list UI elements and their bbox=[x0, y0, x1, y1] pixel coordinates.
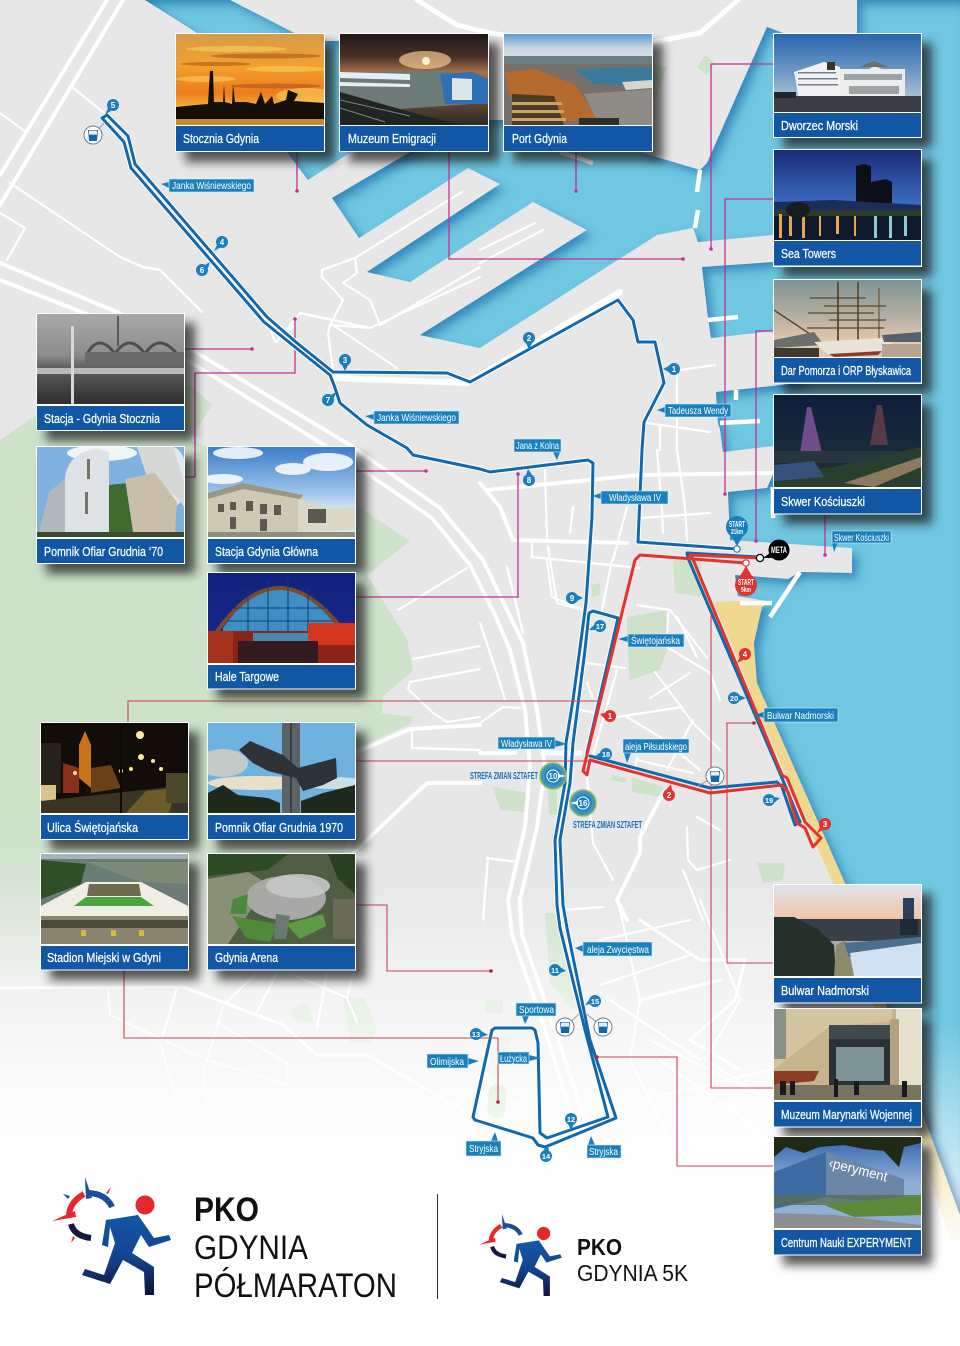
street label: Skwer Kościuszki: Skwer Kościuszki bbox=[834, 532, 889, 544]
logo text: PKO bbox=[194, 1191, 259, 1229]
beach sand bbox=[713, 600, 960, 1260]
blue half marathon route bbox=[102, 115, 800, 1147]
km marker: 2: 2 bbox=[527, 334, 532, 343]
caption: Port Gdynia bbox=[512, 131, 568, 146]
caption bbox=[208, 946, 356, 970]
logo text: PÓŁMARATON bbox=[194, 1267, 397, 1305]
photo: street at night bbox=[41, 723, 188, 813]
relay zone: 16 bbox=[570, 790, 596, 816]
km marker: 9 bbox=[566, 592, 583, 604]
logo: PKO Gdynia 5K bbox=[479, 1214, 689, 1296]
street label: Janka Wiśniewskiego south bbox=[365, 411, 459, 424]
caption bbox=[36, 406, 184, 430]
panel: Ulica Świętojańska bbox=[40, 722, 199, 850]
5K marker: 3: 3 bbox=[823, 820, 828, 829]
5K marker: 4: 4 bbox=[743, 650, 748, 659]
water station cup centre bbox=[698, 767, 724, 786]
photo: market hall at night bbox=[208, 573, 355, 663]
street label: Łużycka: Łużycka bbox=[500, 1053, 527, 1065]
5K marker: 2: 2 bbox=[667, 791, 672, 800]
km marker: 8 bbox=[523, 469, 535, 486]
photo: cruise ship and terminal bbox=[774, 34, 921, 112]
caption: Gdynia Arena bbox=[215, 950, 279, 965]
panel: Muzeum Emigracji bbox=[339, 33, 499, 162]
panel: Stocznia Gdynia bbox=[175, 33, 336, 162]
photo: main railway station bbox=[208, 447, 355, 537]
relay zone: 16: 16 bbox=[579, 799, 588, 808]
km marker: 15: 15 bbox=[591, 997, 599, 1006]
street label: Tadeusza Wendy bbox=[657, 404, 731, 417]
caption bbox=[208, 814, 356, 840]
caption bbox=[774, 978, 922, 1003]
km marker: 1 bbox=[663, 363, 680, 375]
caption bbox=[40, 946, 188, 970]
red 5K route bbox=[583, 555, 821, 847]
km marker: 11 bbox=[549, 964, 566, 976]
relay zone caption right: STREFA ZMIAN SZTAFET bbox=[573, 820, 642, 831]
km marker: 7: 7 bbox=[326, 396, 331, 405]
photo: emigration museum at night bbox=[340, 34, 488, 125]
km marker: 12 bbox=[565, 1113, 577, 1130]
street label: Stryjska west bbox=[466, 1132, 501, 1156]
street label: Sportowa bbox=[516, 1003, 556, 1024]
caption: Dar Pomorza i ORP Błyskawica bbox=[781, 363, 912, 378]
panel: Hale Targowe bbox=[207, 572, 366, 699]
logo divider bbox=[437, 1194, 438, 1299]
road network bbox=[0, 0, 773, 1200]
photo: city stadium bbox=[41, 854, 188, 944]
street label: Bulwar Nadmorski: Bulwar Nadmorski bbox=[767, 710, 834, 722]
meta finish marker: META bbox=[771, 545, 787, 555]
km marker: 17: 17 bbox=[596, 622, 604, 631]
caption bbox=[774, 112, 922, 138]
panel: Dar Pomorza i ORP Błyskawica bbox=[773, 279, 932, 394]
km marker: 14: 14 bbox=[542, 1152, 551, 1161]
caption bbox=[208, 664, 356, 689]
caption: Pomnik Ofiar Grudnia ‘70 bbox=[44, 544, 163, 559]
5K marker: 1 bbox=[600, 710, 616, 722]
relay zone: 10: 10 bbox=[549, 772, 558, 781]
km marker: 6 bbox=[196, 262, 210, 276]
street label: Skwer Kościuszki bbox=[832, 531, 891, 552]
photo: science centre building: ‹peryment bbox=[827, 1154, 889, 1184]
street label: Władysława IV south: Władysława IV bbox=[501, 738, 552, 750]
caption: Hale Targowe bbox=[215, 669, 279, 684]
km marker: 11: 11 bbox=[551, 966, 559, 975]
meta finish marker bbox=[756, 540, 790, 562]
km marker: 9: 9 bbox=[570, 594, 575, 603]
icon: small runner and compass bbox=[479, 1214, 562, 1296]
caption bbox=[774, 1230, 922, 1255]
logo text small bbox=[577, 1234, 689, 1286]
photo: monument slabs bbox=[37, 447, 184, 537]
photo: shipyard at sunset bbox=[176, 34, 324, 125]
street label: Stryjska east bbox=[587, 1136, 621, 1158]
logo text: GDYNIA bbox=[194, 1229, 308, 1267]
street label: Stryjska east: Stryjska bbox=[589, 1146, 618, 1158]
start 21 km marker: START bbox=[729, 520, 745, 529]
relay zone caption left: STREFA ZMIAN SZTAFET bbox=[470, 771, 538, 782]
caption: Skwer Kościuszki bbox=[781, 494, 865, 509]
street label: Stryjska west: Stryjska bbox=[469, 1143, 498, 1155]
start 21 km marker bbox=[726, 516, 748, 552]
street label: aleja Zwycięstwa bbox=[575, 942, 652, 956]
km marker: 3 bbox=[339, 354, 351, 371]
5K marker: 3 bbox=[817, 818, 831, 833]
stadium pitch bbox=[487, 1085, 507, 1118]
caption bbox=[774, 488, 922, 514]
km marker: 13 bbox=[470, 1028, 488, 1040]
water: harbour and sea bbox=[145, 0, 960, 1215]
5K marker: 2 bbox=[663, 784, 675, 801]
km marker: 2 bbox=[523, 332, 535, 350]
caption: Ulica Świętojańska bbox=[47, 820, 139, 835]
photo: container port bbox=[504, 34, 652, 125]
street label: Świętojańska: Świętojańska bbox=[631, 634, 680, 647]
panel: Centrum Nauki EXPERYMENT bbox=[773, 1136, 932, 1265]
km marker: 19 bbox=[763, 794, 780, 806]
street label: Janka Wiśniewskiego north: Janka Wiśniewskiego bbox=[172, 180, 251, 192]
caption: Dworzec Morski bbox=[781, 118, 858, 133]
photo: science centre building bbox=[774, 1137, 921, 1228]
caption: Sea Towers bbox=[781, 246, 836, 261]
km marker: 18 bbox=[594, 748, 612, 760]
panel: Gdynia Arena bbox=[207, 853, 366, 980]
caption: Muzeum Marynarki Wojennej bbox=[781, 1107, 912, 1122]
logo text small: PKO bbox=[577, 1234, 622, 1260]
panel: Stacja Gdynia Główna bbox=[203, 446, 366, 574]
street label: Jana z Kolna: Jana z Kolna bbox=[516, 440, 559, 452]
street label: aleja Piłsudskiego: aleja Piłsudskiego bbox=[625, 741, 687, 753]
photo: steel cross monument bbox=[208, 723, 355, 813]
photo: sports arena aerial bbox=[208, 854, 355, 944]
panel: Stadion Miejski w Gdyni bbox=[40, 853, 199, 980]
start 5 km marker bbox=[735, 560, 757, 596]
caption: Stacja - Gdynia Stocznia bbox=[44, 411, 161, 426]
street label: aleja Zwycięstwa: aleja Zwycięstwa bbox=[587, 944, 649, 956]
street label: Janka Wiśniewskiego south: Janka Wiśniewskiego bbox=[377, 412, 456, 424]
km marker: 14 bbox=[540, 1145, 552, 1162]
street label: aleja Piłsudskiego bbox=[623, 739, 689, 763]
red connector lines bbox=[124, 613, 773, 1166]
caption: Stacja Gdynia Główna bbox=[215, 544, 319, 559]
photo: square at night bbox=[774, 395, 921, 487]
jetties bbox=[560, 152, 800, 617]
water station cup right of route bbox=[585, 1013, 612, 1036]
km marker: 4 bbox=[214, 236, 228, 251]
panel: Pomnik Ofiar Grudnia 1970 bbox=[198, 722, 368, 850]
km marker: 20 bbox=[728, 692, 746, 704]
caption: Pomnik Ofiar Grudnia 1970 bbox=[215, 820, 343, 835]
caption bbox=[176, 126, 324, 152]
caption bbox=[504, 126, 652, 152]
panel: Skwer Kościuszki bbox=[773, 394, 932, 524]
street label: Sportowa: Sportowa bbox=[519, 1004, 554, 1016]
street label: Świętojańska bbox=[618, 634, 684, 647]
km marker: 4: 4 bbox=[220, 238, 225, 247]
caption: Bulwar Nadmorski bbox=[781, 983, 869, 998]
street label: Tadeusza Wendy: Tadeusza Wendy bbox=[668, 405, 729, 417]
caption bbox=[36, 538, 184, 564]
panel: Port Gdynia bbox=[503, 33, 663, 162]
street label: Władysława IV north bbox=[592, 491, 668, 504]
magenta connector lines bbox=[185, 64, 827, 597]
caption bbox=[208, 538, 356, 564]
km marker: 17 bbox=[589, 620, 606, 632]
caption: Muzeum Emigracji bbox=[348, 131, 436, 146]
logo text bbox=[194, 1191, 397, 1305]
panel: Sea Towers bbox=[773, 149, 932, 277]
km marker: 19: 19 bbox=[765, 796, 773, 805]
photo: naval museum entrance bbox=[774, 1009, 921, 1100]
km marker: 18: 18 bbox=[602, 750, 610, 759]
caption: Stocznia Gdynia bbox=[183, 131, 260, 146]
km marker: 15 bbox=[585, 995, 601, 1007]
caption: Stadion Miejski w Gdyni bbox=[47, 950, 161, 965]
panel: Dworzec Morski bbox=[773, 33, 932, 148]
caption bbox=[340, 126, 488, 152]
icon: runner and compass bbox=[52, 1177, 171, 1295]
water station cup left of route bbox=[556, 1014, 579, 1036]
panel: Stacja Gdynia Stocznia bbox=[36, 313, 195, 441]
km marker: 5 bbox=[105, 99, 119, 115]
start 21 km marker: 21km bbox=[731, 529, 743, 536]
street label: Bulwar Nadmorski bbox=[753, 708, 838, 722]
km marker: 1: 1 bbox=[672, 365, 677, 374]
5K marker: 4 bbox=[737, 648, 751, 663]
km marker: 12: 12 bbox=[567, 1115, 575, 1124]
caption bbox=[774, 240, 922, 266]
logo: PKO Gdynia Półmaraton bbox=[52, 1177, 397, 1305]
photo: seaside boulevard at dusk bbox=[774, 885, 921, 976]
start 5 km marker: 5km bbox=[741, 587, 751, 594]
km marker: 20: 20 bbox=[730, 694, 738, 703]
km marker: 13: 13 bbox=[472, 1030, 480, 1039]
caption bbox=[774, 1102, 922, 1127]
km marker: 6: 6 bbox=[200, 266, 205, 275]
caption: Centrum Nauki EXPERYMENT bbox=[781, 1235, 912, 1250]
street label: Władysława IV north: Władysława IV bbox=[609, 492, 661, 504]
relay zone: 10 bbox=[540, 763, 566, 789]
street label: Janka Wiśniewskiego north bbox=[161, 179, 254, 192]
km marker: 5: 5 bbox=[111, 101, 116, 110]
logo text small: GDYNIA 5K bbox=[577, 1260, 689, 1286]
photo: tall ship bbox=[774, 280, 921, 357]
caption bbox=[40, 814, 188, 840]
panel: Bulwar Nadmorski bbox=[773, 884, 932, 1013]
panel: Muzeum Marynarki Wojennej bbox=[773, 1008, 932, 1137]
water station cup top bbox=[84, 122, 105, 144]
km marker: 8: 8 bbox=[527, 476, 532, 485]
panel: Pomnik Ofiar Grudnia '70 bbox=[36, 445, 195, 574]
photo: historic railway station bbox=[37, 314, 184, 404]
green areas bbox=[0, 55, 785, 1080]
5K marker: 1: 1 bbox=[608, 712, 613, 721]
street label: Jana z Kolna bbox=[514, 439, 561, 460]
km marker: 7 bbox=[322, 392, 336, 406]
photo: Sea Towers at dusk bbox=[774, 150, 921, 240]
street label: Olimijska: Olimijska bbox=[430, 1056, 464, 1068]
start 5 km marker: START bbox=[738, 578, 754, 587]
km marker: 3: 3 bbox=[343, 356, 348, 365]
fade over land toward the bottom bbox=[0, 880, 960, 1346]
caption bbox=[774, 358, 922, 383]
